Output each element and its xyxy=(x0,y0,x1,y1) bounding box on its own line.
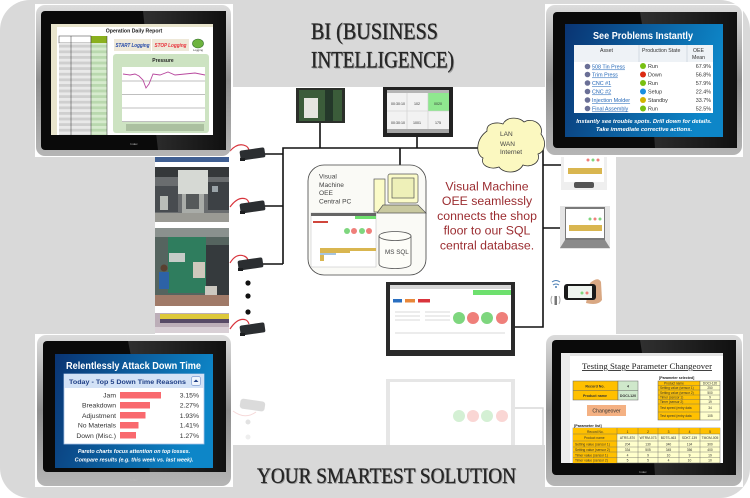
asset status table: Run xyxy=(648,64,658,70)
tablet dashboard monitor: 00:30:10 xyxy=(391,121,405,125)
parameter list table: 345 xyxy=(666,448,671,452)
parameter list table: 2 xyxy=(647,430,649,434)
label: Visual Machine OEE Central PC: Central PC xyxy=(319,198,351,206)
tablet: operation daily report xyxy=(36,5,231,156)
parameter selected table: 105 xyxy=(707,414,713,418)
tablet logo: Indec xyxy=(130,142,138,146)
parameter list table: 19 xyxy=(708,453,712,457)
label: Visual Machine OEE Central PC: Visual xyxy=(319,174,337,180)
parameter selected table: 19 xyxy=(708,400,712,404)
parameter list table xyxy=(573,424,720,463)
top 5 down time bar chart: Today - Top 5 Down Time Reasons xyxy=(69,380,187,386)
asset status table: Mean xyxy=(692,55,705,61)
heading: Relentlessly Attack Down Time xyxy=(66,361,201,372)
parameter list table: 9 xyxy=(647,453,649,457)
title: BI: INTELLIGENCE) xyxy=(312,48,455,74)
faded monitor reflection xyxy=(386,379,543,445)
tablet dashboard monitor: 0020 xyxy=(434,102,442,106)
icon: MS SQL database: MS SQL xyxy=(385,249,409,256)
parameter list table: 10 xyxy=(708,458,712,462)
start button: START Logging xyxy=(116,43,150,49)
sensor devices xyxy=(230,145,266,336)
title: BI: BI (BUSINESS xyxy=(311,19,438,44)
wall monitor with video xyxy=(296,88,345,123)
device 4 xyxy=(230,319,266,336)
wide dashboard monitor xyxy=(386,282,515,356)
logging indicator xyxy=(192,39,204,52)
laptop xyxy=(560,206,610,249)
machine photos xyxy=(155,157,229,333)
parameter list table: Setting value (sensor 2) xyxy=(575,448,610,452)
asset status table: 33.7% xyxy=(696,98,711,104)
sheet title: Testing Stage Parameter Changeover xyxy=(582,361,712,371)
parameter list table: 4 xyxy=(668,458,670,462)
heading: See Problems Instantly xyxy=(593,31,693,42)
parameter selected table xyxy=(658,376,720,420)
report title: Operation Daily Report xyxy=(106,28,163,34)
asset status table: OEE xyxy=(693,48,704,54)
top 5 down time bar chart: Jam xyxy=(103,392,116,400)
parameter list table: Product name xyxy=(584,436,605,440)
parameter list table: 5 xyxy=(709,430,711,434)
cloud: LAN WAN Internet: WAN xyxy=(500,141,515,148)
top 5 down time bar chart: 1.27% xyxy=(180,433,199,440)
tablet logo: Indec xyxy=(639,470,647,474)
parameter list table: 340 xyxy=(666,442,671,446)
mini dashboard screenshot xyxy=(311,213,376,267)
asset status table: 52.5% xyxy=(696,106,711,112)
asset status table: Asset xyxy=(600,48,614,54)
title: your smartest solution: YOUR SMARTEST SOLUTION xyxy=(258,464,517,489)
parameter list table: Timer value (sensor 2) xyxy=(575,458,608,462)
parameter list table: 4 xyxy=(689,430,691,434)
smartphone in hand xyxy=(564,279,602,304)
parameter list table: 400 xyxy=(707,448,713,452)
record selector: 4 xyxy=(627,384,629,388)
callout: red description: floor to our SQL xyxy=(444,224,531,238)
callout: red description: Visual Machine xyxy=(445,180,529,194)
changeover button: Changeover xyxy=(592,408,621,414)
tablet logo: Indec xyxy=(130,478,138,482)
parameter selected table: 250 xyxy=(707,386,713,390)
parameter list table: 204 xyxy=(625,442,630,446)
device 1 xyxy=(230,145,266,161)
asset status table: Production State xyxy=(642,48,680,54)
label: Visual Machine OEE Central PC: OEE xyxy=(319,190,334,197)
continuation dots xyxy=(245,280,251,315)
top 5 down time bar chart: No Materials xyxy=(78,422,117,430)
parameter selected table: 34 xyxy=(708,406,712,410)
device 3 xyxy=(230,255,264,271)
cloud: LAN WAN Internet xyxy=(478,118,545,172)
caption: Take immediate corrective actions. xyxy=(596,127,692,133)
top 5 down time bar chart: Down (Misc.) xyxy=(76,433,116,440)
asset status table: Final Assembly xyxy=(592,106,629,112)
record selector: Product name xyxy=(583,394,607,398)
parameter list table: 3 xyxy=(668,430,670,434)
tablet: see problems instantly xyxy=(546,5,742,155)
tablet: relentlessly attack down time xyxy=(37,335,231,486)
tablet: testing stage parameter changeover xyxy=(546,335,742,486)
parameter list table: 356 xyxy=(687,448,692,452)
parameter list table: SDKT-139 xyxy=(682,436,697,440)
tablet dashboard monitor: 1001 xyxy=(413,121,421,125)
title: BI: BI (BUSINESS xyxy=(312,20,439,45)
parameter list table: 10 xyxy=(688,458,691,462)
photo: green press with worker xyxy=(155,228,229,306)
asset status table: 57.9% xyxy=(696,81,711,87)
label: Visual Machine OEE Central PC: Machine xyxy=(319,182,344,189)
top 5 down time bar chart: 3.15% xyxy=(180,392,199,400)
asset status table: Run xyxy=(648,81,658,87)
parameter list table: 4 xyxy=(627,453,629,457)
parameter selected table: [Parameter selected] xyxy=(659,376,694,380)
asset status table: Injection Molder xyxy=(592,98,630,104)
asset status table: Trim Press xyxy=(592,72,618,78)
photo: strip below tablet xyxy=(155,157,229,162)
parameter list table: WTRM-073 xyxy=(640,436,657,440)
asset status table: Run xyxy=(648,106,658,112)
parameter list table: Timer value (sensor 1) xyxy=(575,453,608,457)
desktop monitor xyxy=(561,157,607,190)
asset status table: CNC #2 xyxy=(592,90,611,96)
parameter list table: ATRS-870 xyxy=(620,436,635,440)
caption: Instantly see trouble spots. Drill down for details. xyxy=(576,119,712,125)
parameter selected table: 9 xyxy=(709,396,711,400)
parameter selected table: 500 xyxy=(707,391,713,395)
faded device reflection xyxy=(233,398,266,440)
network lines xyxy=(260,123,562,327)
data table xyxy=(59,36,107,135)
asset status table: CNC #1 xyxy=(592,81,611,87)
parameter list table: BDTS-463 xyxy=(661,436,676,440)
icon: desktop computer xyxy=(374,174,426,213)
parameter selected table: Test speed (entry data xyxy=(660,414,692,418)
title: your smartest solution: YOUR SMARTEST SOLUTION xyxy=(257,463,516,488)
asset status table: 508 Tin Press xyxy=(592,64,625,70)
tablet dashboard monitor: 175 xyxy=(435,121,441,125)
parameter list table: 5 xyxy=(647,458,649,462)
parameter list table: [Parameter list] xyxy=(574,424,602,428)
tablet dashboard monitor: 102 xyxy=(414,102,420,106)
parameter list table: 5 xyxy=(627,458,629,462)
record selector xyxy=(573,381,638,400)
top 5 down time bar chart: 2.27% xyxy=(180,402,199,410)
asset status table: Standby xyxy=(648,98,668,104)
parameter list table: Setting value (sensor 1) xyxy=(575,442,610,446)
callout: red description: connects the shop xyxy=(437,209,537,223)
parameter list table: 334 xyxy=(625,448,630,452)
callout: red description: central database. xyxy=(440,238,534,252)
photo: press machine xyxy=(155,167,229,222)
parameter list table: Record No. xyxy=(587,430,604,434)
title: BI: INTELLIGENCE) xyxy=(311,48,454,72)
parameter selected table: Product name xyxy=(664,382,684,386)
top 5 down time bar chart xyxy=(64,374,204,444)
stop button: STOP Logging xyxy=(154,43,187,49)
parameter list table: 9 xyxy=(689,453,691,457)
parameter list table: 1 xyxy=(627,430,629,434)
parameter list table: 130 xyxy=(645,442,651,446)
parameter selected table: Timer (sensor 2) xyxy=(660,400,683,404)
parameter selected table: Setting value (sensor 1) xyxy=(660,386,694,390)
caption: Pareto charts focus attention on top losses. xyxy=(78,449,191,455)
parameter list table: 505 xyxy=(645,448,651,452)
asset status table: Setup xyxy=(648,90,662,96)
title: BI xyxy=(311,19,455,74)
record selector: DOCI-120 xyxy=(620,394,636,398)
asset status table: 22.4% xyxy=(696,90,711,96)
asset status table xyxy=(574,45,713,113)
parameter selected table: Setting value (sensor 2) xyxy=(660,391,694,395)
device 2 xyxy=(230,198,266,214)
start button xyxy=(114,39,151,51)
parameter list table: 134 xyxy=(687,442,692,446)
logging indicator: Logging xyxy=(193,48,203,52)
pressure chart xyxy=(113,54,209,133)
panel: central PC xyxy=(308,165,426,275)
record selector: Record No. xyxy=(585,384,605,388)
parameter list table: 300 xyxy=(707,442,713,446)
tablet dashboard monitor: 00:30:10 xyxy=(391,102,405,106)
parameter selected table: DOCI-120 xyxy=(703,382,717,386)
tablet dashboard monitor xyxy=(383,87,453,137)
photo: yellow gantry xyxy=(155,313,229,333)
pressure chart: Pressure xyxy=(152,58,174,64)
parameter selected table: Timer (sensor 1) xyxy=(660,396,683,400)
top 5 down time bar chart: Adjustment xyxy=(82,413,116,420)
asset status table: Down xyxy=(648,72,662,78)
caption: Compare results (e.g. this week vs. last week). xyxy=(75,458,194,464)
parameter list table: TMOM-005 xyxy=(702,436,718,440)
parameter list table: 10 xyxy=(667,453,670,457)
cloud: LAN WAN Internet: LAN xyxy=(500,131,513,138)
callout: red description: OEE seamlessly xyxy=(442,194,533,208)
cloud: LAN WAN Internet: Internet xyxy=(500,149,522,156)
parameter selected table: Test speed (entry data xyxy=(660,406,692,410)
changeover button xyxy=(587,405,626,416)
stop button xyxy=(152,39,189,51)
top 5 down time bar chart: 1.93% xyxy=(180,413,199,420)
icon: wifi and antenna xyxy=(551,280,560,305)
asset status table: 67.9% xyxy=(696,64,711,70)
top 5 down time bar chart: 1.41% xyxy=(180,422,199,430)
top 5 down time bar chart: Breakdown xyxy=(82,402,116,410)
asset status table: 56.8% xyxy=(696,72,711,78)
